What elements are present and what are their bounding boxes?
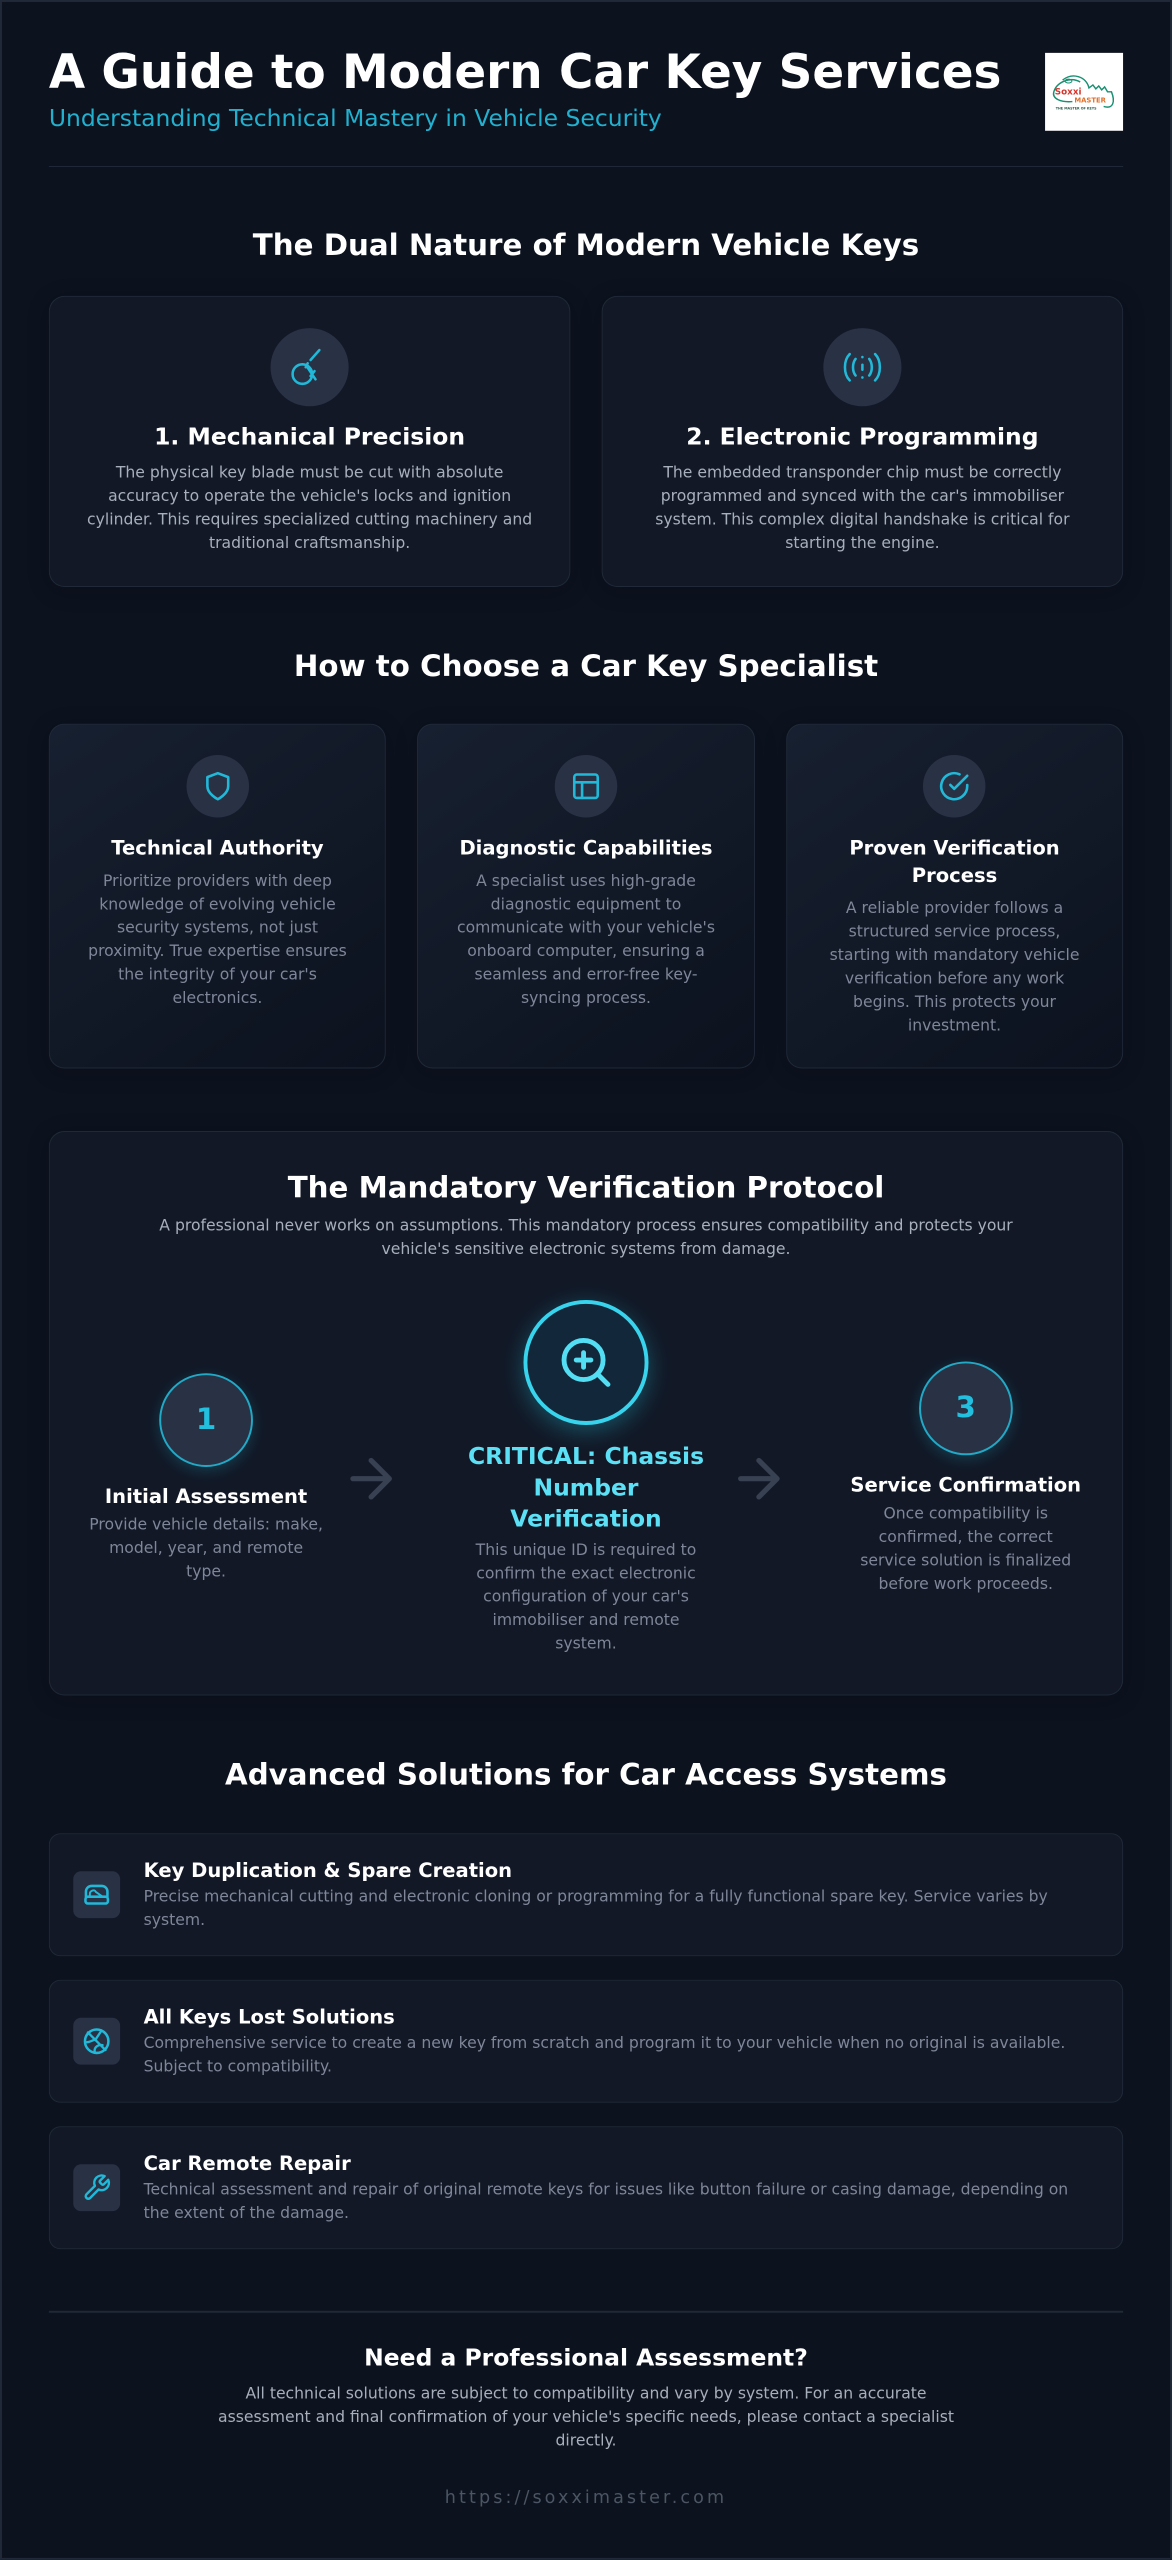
card title: Technical Authority	[111, 836, 324, 860]
step 2 text: system.	[555, 1634, 617, 1653]
card text: knowledge of evolving vehicle	[99, 894, 336, 913]
footer text: All technical solutions are subject to compatibility and vary by system. For an accurate	[245, 2384, 927, 2402]
service title: Car Remote Repair	[144, 2152, 351, 2175]
step 3 title: Service Confirmation	[850, 1473, 1081, 1496]
panel: electronic programming	[602, 296, 1123, 586]
service text: Comprehensive service to create a new key from scratch and program it to your vehicle when no original is available.	[144, 2033, 1065, 2052]
card text: diagnostic equipment to	[491, 894, 681, 913]
step 3	[850, 1360, 1081, 1593]
footer url: https://soxximaster.com	[445, 2488, 727, 2508]
step 2 text: This unique ID is required to	[476, 1541, 696, 1559]
step 1 number: 1	[196, 1403, 216, 1437]
step 3 number: 3	[956, 1391, 976, 1425]
card text: traditional craftsmanship.	[209, 533, 410, 552]
card text: verification before any work	[845, 969, 1064, 987]
service text: Subject to compatibility.	[144, 2056, 332, 2075]
service text	[144, 2179, 1068, 2222]
step 1 title: Initial Assessment	[105, 1484, 307, 1508]
panel: remote repair	[49, 2126, 1123, 2249]
header: title: A Guide to Modern Car Key Services	[49, 45, 1001, 100]
footer text	[218, 2384, 954, 2449]
icon: check circle	[923, 755, 986, 818]
card text: Prioritize providers with deep	[103, 871, 332, 889]
card title: Proven Verification	[849, 836, 1060, 860]
card text	[457, 871, 715, 1007]
arrow 1	[350, 1458, 392, 1500]
card text: programmed and synced with the car's immobiliser	[661, 486, 1064, 505]
service text: Precise mechanical cutting and electronic cloning or programming for a fully functional spare key. Service varies by	[144, 1886, 1048, 1905]
icon: layout	[555, 755, 617, 818]
heading: dual nature: The Dual Nature of Modern Vehicle Keys	[253, 229, 919, 263]
footer heading: Need a Professional Assessment?	[364, 2344, 808, 2372]
service text: Technical assessment and repair of original remote keys for issues like button failure or casing damage, depending on	[144, 2179, 1068, 2198]
card text: system. This complex digital handshake is critical for	[655, 510, 1070, 528]
step 2 title	[468, 1442, 704, 1532]
card text: cylinder. This requires specialized cutting machinery and	[87, 510, 532, 528]
card text: syncing process.	[521, 988, 651, 1007]
service text	[144, 1886, 1048, 1928]
card title: 1. Mechanical Precision	[154, 423, 465, 451]
card text: proximity. True expertise ensures	[88, 941, 347, 960]
step 2 text: configuration of your car's	[483, 1587, 689, 1606]
card text: starting with mandatory vehicle	[830, 945, 1079, 964]
card title: Process	[912, 864, 997, 887]
icon: crossed circle	[73, 2017, 120, 2064]
panel: mandatory verification protocol	[49, 1131, 1123, 1695]
step 1 text: type.	[186, 1562, 226, 1580]
card text	[87, 463, 532, 552]
step 2 title: Verification	[510, 1505, 662, 1532]
icon: key	[271, 328, 349, 406]
card text: communicate with your vehicle's	[457, 918, 715, 936]
panel intro: vehicle's sensitive electronic systems from damage.	[382, 1239, 790, 1258]
step 1 number	[159, 1373, 253, 1467]
step 2 text: immobiliser and remote	[492, 1611, 680, 1629]
service text: the extent of the damage.	[144, 2203, 349, 2221]
service title: Key Duplication & Spare Creation	[144, 1859, 512, 1882]
panel: diagnostic capabilities	[417, 723, 755, 1068]
step 1 text: model, year, and remote	[109, 1538, 303, 1557]
step 3 text	[860, 1504, 1071, 1593]
step 2 title: CRITICAL: Chassis	[468, 1442, 704, 1470]
card text: begins. This protects your	[853, 992, 1056, 1011]
card text: seamless and error-free key-	[474, 965, 698, 983]
card text	[830, 898, 1079, 1034]
panel: all keys lost	[49, 1979, 1123, 2102]
card title	[849, 836, 1060, 887]
card text: accuracy to operate the vehicle's locks and ignition	[108, 486, 511, 505]
card text	[88, 871, 347, 1007]
footer text: assessment and final confirmation of your vehicle's specific needs, please contact a specialist	[218, 2407, 954, 2426]
logo: SoxxiMaster: MASTER	[1074, 96, 1107, 104]
step 1 text	[89, 1515, 323, 1580]
step 3 text: Once compatibility is	[883, 1504, 1048, 1522]
card text: electronics.	[173, 988, 262, 1007]
arrow 2	[738, 1458, 780, 1500]
step 1	[89, 1372, 323, 1580]
service title: All Keys Lost Solutions	[144, 2005, 395, 2029]
step 2: critical	[468, 1294, 704, 1653]
card title: 2. Electronic Programming	[686, 423, 1039, 451]
card text	[655, 463, 1070, 552]
header: subtitle: Understanding Technical Mastery in Vehicle Security	[49, 105, 662, 132]
step 3 text: service solution is finalized	[860, 1551, 1071, 1569]
panel intro	[159, 1216, 1013, 1258]
icon: key box	[73, 1871, 120, 1918]
card text: onboard computer, ensuring a	[467, 941, 705, 960]
step 1 text: Provide vehicle details: make,	[89, 1515, 323, 1533]
icon: zoom in	[523, 1300, 649, 1425]
icon: wrench	[73, 2164, 120, 2211]
card text: The embedded transponder chip must be correctly	[663, 463, 1061, 481]
card text: The physical key blade must be cut with absolute	[116, 463, 503, 481]
panel: mechanical precision	[49, 296, 570, 586]
panel: proven verification	[786, 723, 1123, 1068]
step 3 text: before work proceeds.	[878, 1574, 1053, 1593]
card text: A reliable provider follows a	[846, 898, 1063, 917]
card text: starting the engine.	[785, 533, 940, 552]
panel intro: A professional never works on assumptions. This mandatory process ensures compatibility and protects your	[159, 1216, 1013, 1234]
panel: key duplication	[49, 1833, 1123, 1956]
step 2 text	[476, 1541, 696, 1653]
service text	[144, 2033, 1065, 2075]
icon: shield	[186, 755, 249, 818]
card text: the integrity of your car's	[118, 965, 317, 983]
card text: security systems, not just	[117, 918, 318, 936]
step 2 title: Number	[534, 1473, 638, 1501]
logo: SoxxiMaster: THE MASTER OF KEYS	[1056, 106, 1097, 110]
card text: A specialist uses high-grade	[476, 871, 696, 889]
step 3 number	[919, 1361, 1013, 1455]
step 3 text: confirmed, the correct	[879, 1527, 1053, 1546]
footer text: directly.	[555, 2431, 617, 2449]
service text: system.	[144, 1910, 205, 1928]
step 2 text: confirm the exact electronic	[476, 1564, 696, 1583]
icon: signal	[823, 328, 901, 406]
panel: technical authority	[49, 723, 386, 1068]
logo: SoxxiMaster: Soxxi	[1055, 87, 1082, 97]
card title: Diagnostic Capabilities	[459, 836, 713, 860]
logo: SoxxiMaster	[1045, 52, 1124, 131]
heading: advanced solutions: Advanced Solutions for Car Access Systems	[225, 1758, 947, 1792]
heading: choose a specialist: How to Choose a Car Key Specialist	[294, 649, 878, 683]
panel heading: The Mandatory Verification Protocol	[288, 1171, 884, 1206]
card text: structured service process,	[849, 922, 1060, 940]
card text: investment.	[908, 1016, 1001, 1034]
